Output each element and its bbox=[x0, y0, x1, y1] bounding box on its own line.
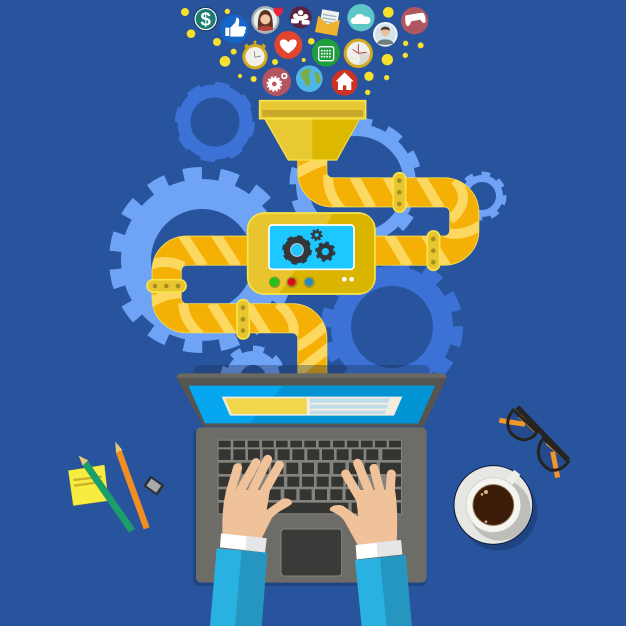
green pencil bbox=[79, 456, 132, 531]
icon: house bbox=[332, 70, 358, 96]
right hand bbox=[330, 463, 397, 545]
clamp: top bbox=[393, 173, 406, 212]
icon: stopwatch bbox=[242, 41, 268, 69]
icon: calendar bbox=[312, 39, 340, 67]
gears background bbox=[116, 86, 504, 407]
screen window bbox=[222, 397, 402, 416]
icon cloud bbox=[181, 4, 428, 96]
icon: thumbs up bbox=[220, 15, 249, 43]
laptop bbox=[177, 373, 447, 626]
icon: clock bbox=[344, 39, 373, 68]
icon: heart bbox=[274, 31, 302, 59]
saucer bbox=[454, 466, 537, 551]
funnel bbox=[260, 101, 366, 160]
orange pencil bbox=[115, 442, 147, 528]
gear: large blue bbox=[327, 262, 457, 392]
icon: envelope bbox=[315, 9, 340, 36]
right cuff bbox=[356, 540, 402, 559]
gear: small bottom bbox=[224, 349, 282, 407]
left hand bbox=[222, 459, 292, 538]
icon: man avatar bbox=[373, 22, 398, 47]
handle bbox=[508, 472, 517, 483]
laptop screen bbox=[188, 386, 435, 423]
icon: dollar bbox=[194, 7, 217, 31]
gear: top blue bbox=[178, 86, 252, 158]
pipe bbox=[147, 101, 482, 373]
yellow dots bbox=[181, 7, 424, 95]
laptop base bbox=[193, 427, 427, 586]
laptop lid bbox=[177, 373, 447, 427]
icon: people bbox=[290, 6, 312, 28]
touchpad bbox=[281, 529, 342, 576]
coffee cup bbox=[454, 466, 537, 551]
clamp: left bbox=[147, 280, 186, 292]
gear: big light left bbox=[116, 174, 288, 346]
glasses bbox=[499, 407, 568, 478]
laptop shadow on gears bbox=[193, 365, 430, 373]
gear: small right bbox=[460, 174, 504, 218]
machine buttons bbox=[269, 277, 354, 288]
stationery bbox=[68, 442, 165, 531]
left sleeve bbox=[210, 548, 267, 626]
icon: woman avatar bbox=[251, 6, 279, 34]
icon: gears circle bbox=[262, 67, 291, 96]
keyboard bbox=[218, 440, 402, 514]
screen gears bbox=[284, 230, 334, 263]
right sleeve bbox=[355, 555, 412, 626]
clamp: right bbox=[427, 231, 440, 270]
gear: upper right bbox=[294, 122, 418, 246]
icon: globe bbox=[296, 65, 323, 92]
left cuff bbox=[220, 533, 267, 552]
icon: small heart bbox=[273, 7, 283, 17]
machine screen bbox=[269, 225, 354, 269]
icon: cloud circle bbox=[347, 4, 375, 31]
sticky note bbox=[68, 465, 108, 506]
sharpener bbox=[143, 475, 165, 496]
pipe body bbox=[167, 157, 464, 373]
cup bbox=[466, 478, 521, 532]
pipe stripes bbox=[150, 158, 482, 373]
machine bbox=[248, 213, 375, 294]
icon: dollar: $ bbox=[200, 9, 211, 30]
clamp: bottom bbox=[237, 300, 249, 339]
icon: gamepad bbox=[401, 7, 428, 34]
